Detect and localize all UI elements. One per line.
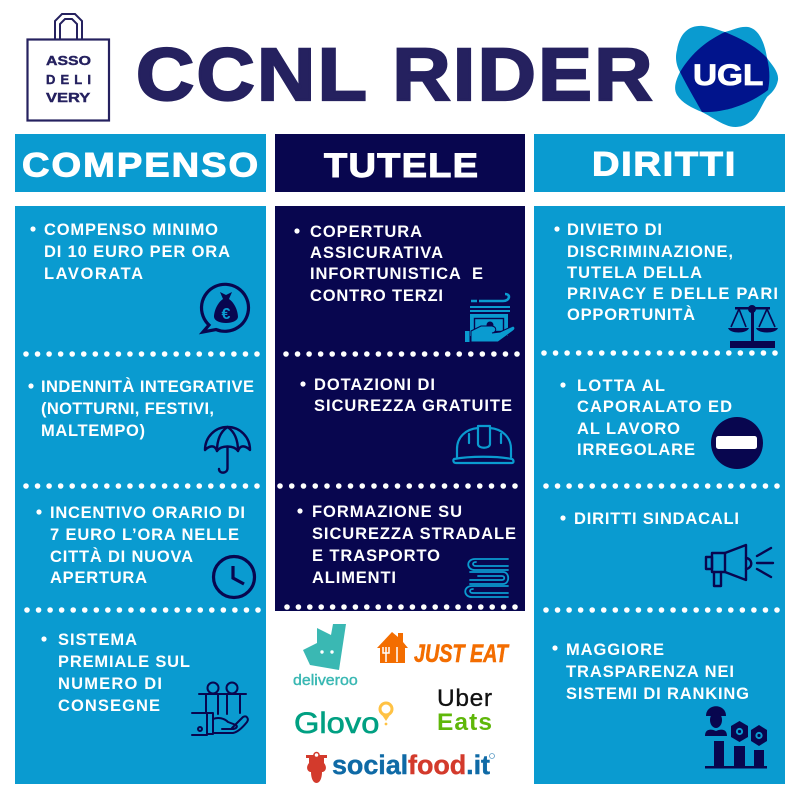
text: copertura: INFORTUNISTICA E bbox=[310, 265, 483, 283]
text: lotta al caporalato: CAPORALATO ED bbox=[577, 398, 732, 416]
icon: insurance hand bbox=[465, 294, 515, 342]
text: dotazioni bbox=[300, 376, 512, 415]
panel: compenso bbox=[15, 206, 266, 784]
text: dotazioni: DOTAZIONI DI bbox=[314, 376, 435, 394]
text: copertura: CONTRO TERZI bbox=[310, 287, 443, 305]
icon: ranking podium bbox=[705, 706, 767, 768]
icon: money bag bbox=[202, 284, 249, 332]
icon: umbrella bbox=[205, 427, 250, 473]
logo: just eat bbox=[377, 632, 510, 668]
icon: clock bbox=[214, 556, 254, 598]
text: maggiore trasparenza: MAGGIORE bbox=[566, 641, 664, 659]
text: divieto: OPPORTUNITÀ bbox=[567, 305, 695, 324]
header: Compenso bbox=[15, 134, 266, 192]
panel: tutele bbox=[275, 206, 525, 611]
text: formazione: E TRASPORTO bbox=[312, 547, 440, 565]
text: divieto: DIVIETO DI bbox=[567, 221, 662, 239]
text: copertura: COPERTURA bbox=[310, 223, 422, 241]
icon: helmet bbox=[453, 426, 514, 463]
logo: UGL: UGL bbox=[693, 58, 763, 92]
text: dotazioni: SICUREZZA GRATUITE bbox=[314, 397, 512, 415]
text: indennità: INDENNITÀ INTEGRATIVE bbox=[41, 377, 254, 396]
text: lotta al caporalato: IRREGOLARE bbox=[577, 441, 695, 459]
text: lotta al caporalato bbox=[560, 377, 732, 459]
text: divieto: TUTELA DELLA bbox=[567, 264, 702, 282]
text: maggiore trasparenza: SISTEMI DI RANKING bbox=[566, 685, 749, 703]
logo: socialfood.it: socialfood.it bbox=[332, 750, 490, 780]
text: indennità: (NOTTURNI, FESTIVI, bbox=[41, 400, 214, 418]
text: maggiore trasparenza: TRASPARENZA NEI bbox=[566, 663, 734, 681]
text: indennità bbox=[28, 377, 254, 440]
text: divieto: PRIVACY E DELLE PARI bbox=[567, 285, 778, 303]
text: indennità: MALTEMPO) bbox=[41, 422, 145, 440]
text: sistema premiale: SISTEMA bbox=[58, 631, 137, 649]
logo: uber eats bbox=[437, 685, 492, 736]
text: lotta al caporalato: AL LAVORO bbox=[577, 420, 680, 438]
header: Diritti: DIRITTI bbox=[592, 144, 737, 183]
text: formazione: FORMAZIONE SU bbox=[312, 503, 462, 521]
logo: deliveroo bbox=[293, 624, 358, 689]
header: Diritti bbox=[534, 134, 785, 192]
text: copertura: ASSICURATIVA bbox=[310, 244, 443, 262]
text: incentivo orario bbox=[36, 504, 245, 587]
text: incentivo orario: INCENTIVO ORARIO DI bbox=[50, 504, 245, 522]
text: diritti sindacali: DIRITTI SINDACALI bbox=[574, 510, 739, 528]
logo: Assodelivery bag: VERY bbox=[46, 92, 90, 105]
header: Tutele bbox=[275, 134, 525, 192]
title: CCNL RIDER bbox=[136, 34, 655, 116]
text: compenso minimo: LAVORATA bbox=[44, 265, 143, 283]
text: compenso minimo bbox=[30, 221, 230, 283]
text: compenso minimo: DI 10 EURO PER ORA bbox=[44, 243, 230, 261]
logo: Assodelivery bag: DELI bbox=[46, 72, 91, 87]
text: sistema premiale: CONSEGNE bbox=[58, 697, 160, 715]
text: sistema premiale: PREMIALE SUL bbox=[58, 653, 190, 671]
text: sistema premiale: NUMERO DI bbox=[58, 675, 162, 693]
text: formazione bbox=[297, 503, 516, 587]
text: compenso minimo: COMPENSO MINIMO bbox=[44, 221, 218, 239]
header: Tutele: TUTELE bbox=[324, 146, 479, 185]
icon: scales bbox=[728, 305, 778, 348]
logo: glovo: Glovo bbox=[294, 706, 379, 740]
logo: Assodelivery bag bbox=[28, 14, 109, 120]
panel: diritti bbox=[534, 206, 785, 784]
icon: megaphone bbox=[706, 545, 773, 586]
text: lotta al caporalato: LOTTA AL bbox=[577, 377, 665, 395]
icon: books bbox=[465, 559, 508, 597]
icon: no entry bbox=[711, 417, 763, 469]
text: incentivo orario: CITTÀ DI NUOVA bbox=[50, 547, 193, 566]
text: incentivo orario: 7 EURO L’ORA NELLE bbox=[50, 526, 239, 544]
logo: uber eats: Eats bbox=[437, 709, 492, 736]
icon: money bag: € bbox=[222, 306, 231, 323]
icon: gift on hand bbox=[192, 682, 248, 735]
logo: just eat: JUST EAT bbox=[414, 640, 510, 668]
text: maggiore trasparenza bbox=[552, 641, 749, 703]
logo: Assodelivery bag: ASSO bbox=[46, 54, 91, 69]
text: formazione: ALIMENTI bbox=[312, 569, 396, 587]
logo: UGL bbox=[675, 26, 778, 127]
text: copertura bbox=[294, 223, 483, 305]
text: divieto bbox=[554, 221, 778, 324]
logo: deliveroo: deliveroo bbox=[293, 673, 358, 689]
text: formazione: SICUREZZA STRADALE bbox=[312, 525, 516, 543]
text: incentivo orario: APERTURA bbox=[50, 569, 147, 587]
text: divieto: DISCRIMINAZIONE, bbox=[567, 243, 733, 261]
text: sistema premiale bbox=[41, 631, 190, 715]
logo: uber eats: Uber bbox=[437, 685, 492, 712]
header: Compenso: COMPENSO bbox=[22, 145, 260, 184]
